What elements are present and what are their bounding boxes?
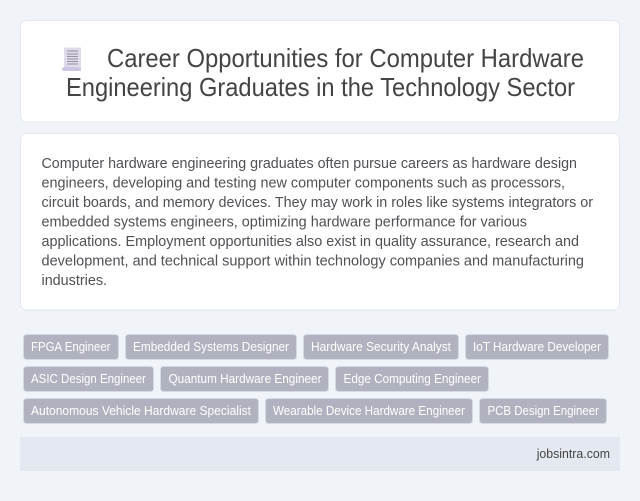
tag: Wearable Device Hardware Engineer: Wearable Device Hardware Engineer: [273, 404, 465, 418]
title: Career Opportunities for Computer Hardware: [107, 45, 584, 73]
title: [66, 45, 584, 102]
footer site name: jobsintra.com: [536, 447, 610, 461]
tag: Embedded Systems Designer: Embedded Systems Designer: [133, 340, 289, 354]
tag: IoT Hardware Developer: [466, 334, 608, 360]
tag: Wearable Device Hardware Engineer: [266, 398, 472, 424]
description text: Computer hardware engineering graduates often pursue careers as hardware design: [42, 156, 577, 172]
title: Engineering Graduates in the Technology Sector: [66, 74, 575, 102]
tag: Edge Computing Engineer: [336, 366, 488, 392]
description text: [42, 156, 593, 289]
tag: Autonomous Vehicle Hardware Specialist: [24, 398, 258, 424]
tag: Edge Computing Engineer: Edge Computing Engineer: [344, 372, 481, 386]
tag: Quantum Hardware Engineer: [160, 366, 328, 392]
tag: PCB Design Engineer: [480, 398, 606, 424]
tag: Embedded Systems Designer: [126, 334, 296, 360]
panel: title card: [20, 20, 620, 122]
tag: FPGA Engineer: [24, 334, 118, 360]
panel: job tags: [24, 334, 608, 424]
description text: engineers, developing and testing new computer components such as processors,: [42, 176, 565, 192]
tag: Quantum Hardware Engineer: Quantum Hardware Engineer: [168, 372, 322, 386]
tag: IoT Hardware Developer: IoT Hardware Developer: [473, 340, 601, 354]
tag: ASIC Design Engineer: ASIC Design Engineer: [31, 372, 146, 386]
tag: Hardware Security Analyst: Hardware Security Analyst: [311, 340, 451, 354]
description text: development, and technical support within technology companies and manufacturing: [42, 254, 584, 270]
tag: Hardware Security Analyst: [304, 334, 458, 360]
description text: embedded systems engineers, optimizing hardware performance for various: [42, 214, 527, 230]
description text: applications. Employment opportunities also exist in quality assurance, research and: [42, 234, 579, 250]
tag: ASIC Design Engineer: [24, 366, 154, 392]
tag: FPGA Engineer: FPGA Engineer: [31, 340, 110, 354]
footer: [20, 437, 620, 471]
tag: Autonomous Vehicle Hardware Specialist: Autonomous Vehicle Hardware Specialist: [31, 404, 251, 418]
tag: PCB Design Engineer: PCB Design Engineer: [488, 404, 599, 418]
description text: circuit boards, and memory devices. They may work in roles like systems integrators or: [42, 195, 593, 211]
icon: paper receipt: [62, 48, 81, 71]
panel: description card: [20, 134, 620, 310]
description text: industries.: [42, 273, 107, 289]
